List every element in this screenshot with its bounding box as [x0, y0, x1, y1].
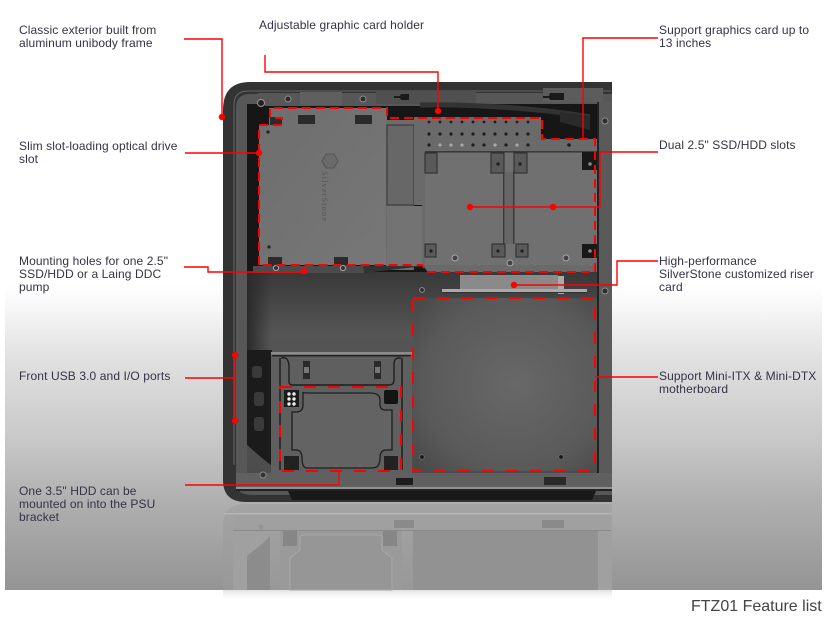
leader: graphics card length — [583, 38, 658, 139]
vent strip — [288, 491, 596, 500]
motherboard tray standoff screws — [420, 455, 563, 459]
caption: FTZ01 Feature list — [691, 598, 822, 615]
center bracket — [386, 120, 414, 270]
bottom rail — [236, 473, 612, 487]
leader: SSD slots — [470, 152, 658, 207]
label: mounting holes — [19, 254, 168, 294]
red dashed zones — [259, 108, 595, 471]
leader: riser card — [514, 261, 658, 285]
motherboard tray — [413, 298, 597, 471]
vent holes — [284, 390, 299, 407]
top rail latch — [394, 94, 409, 100]
zone: 3.5 HDD — [280, 387, 401, 471]
plate screws — [452, 255, 569, 266]
lower interior — [247, 272, 598, 478]
SilverStone logo — [322, 154, 338, 168]
label: 3.5 HDD: mounted on into the PSU — [19, 497, 155, 511]
label: 3.5 HDD: bracket — [19, 510, 59, 524]
label: mounting holes: Mounting holes for one 2.5" — [19, 254, 168, 268]
label: optical drive: Slim slot-loading optical drive — [19, 139, 178, 153]
leader: mounting holes — [184, 267, 304, 272]
reflection of chassis — [223, 504, 612, 602]
bottom rail latches — [396, 478, 413, 485]
label: exterior — [19, 23, 156, 50]
PSU bracket — [271, 352, 412, 473]
SilverStone wordmark: SilverStone — [320, 171, 330, 221]
red leader lines — [184, 38, 658, 485]
left black channel with front IO connectors — [247, 350, 272, 466]
label: mounting holes: pump — [19, 280, 49, 294]
label: motherboard: Support Mini-ITX & Mini-DTX — [659, 369, 816, 383]
upper interior — [247, 104, 598, 272]
top screws — [285, 96, 608, 294]
label: exterior: aluminum unibody frame — [19, 36, 153, 50]
label: front USB: Front USB 3.0 and I/O ports — [19, 369, 170, 383]
chassis body — [223, 82, 612, 502]
corner clips — [582, 152, 597, 170]
red leader dots — [219, 108, 556, 424]
label: motherboard: motherboard — [659, 382, 728, 396]
label: SSD slots: Dual 2.5" SSD/HDD slots — [659, 138, 796, 152]
label: 3.5 HDD — [19, 484, 155, 524]
label: optical drive: slot — [19, 152, 38, 166]
label: riser card: SilverStone customized riser — [659, 267, 814, 281]
optical drive bottom tab — [253, 266, 365, 273]
outer frame — [223, 82, 612, 502]
leader: front USB — [185, 355, 235, 421]
top rail — [258, 93, 598, 106]
left channel shading — [247, 272, 271, 362]
optical drive clips — [298, 115, 315, 124]
label: riser card — [659, 254, 814, 294]
leader: optical drive — [185, 152, 259, 154]
label: 3.5 HDD: One 3.5" HDD can be — [19, 484, 137, 498]
bracket clips — [425, 153, 528, 257]
front bezel — [236, 94, 612, 495]
label: mounting holes: SSD/HDD or a Laing DDC — [19, 267, 161, 281]
bottom corner screw — [260, 472, 266, 478]
label: riser card: card — [659, 280, 683, 294]
leader: motherboard — [595, 376, 658, 378]
cable — [420, 105, 590, 117]
label: graphics card length: 13 inches — [659, 36, 711, 50]
label: exterior: Classic exterior built from — [19, 23, 156, 37]
front IO connector blobs — [252, 366, 264, 431]
label: optical drive — [19, 139, 178, 166]
top corner screw — [258, 100, 264, 106]
leader: exterior — [184, 39, 222, 117]
HDD recess — [292, 392, 392, 468]
SSD bracket plate — [414, 117, 597, 272]
right rail — [598, 102, 612, 478]
frame inner highlight — [234, 91, 611, 465]
leader: 3.5 HDD — [185, 471, 339, 485]
label: graphic card holder: Adjustable graphic card holder — [259, 18, 424, 32]
label: motherboard — [659, 369, 816, 396]
optical drive plate — [259, 108, 387, 265]
centre rail — [503, 172, 504, 244]
zone: motherboard — [413, 298, 595, 471]
label: graphics card length — [659, 23, 809, 50]
zone: optical drive and SSD brackets — [259, 108, 595, 272]
riser card — [442, 275, 587, 294]
perforation holes — [427, 121, 571, 147]
leader: graphic card holder — [265, 55, 438, 111]
label: riser card: High-performance — [659, 254, 757, 268]
label: graphics card length: Support graphics card up to — [659, 23, 809, 37]
